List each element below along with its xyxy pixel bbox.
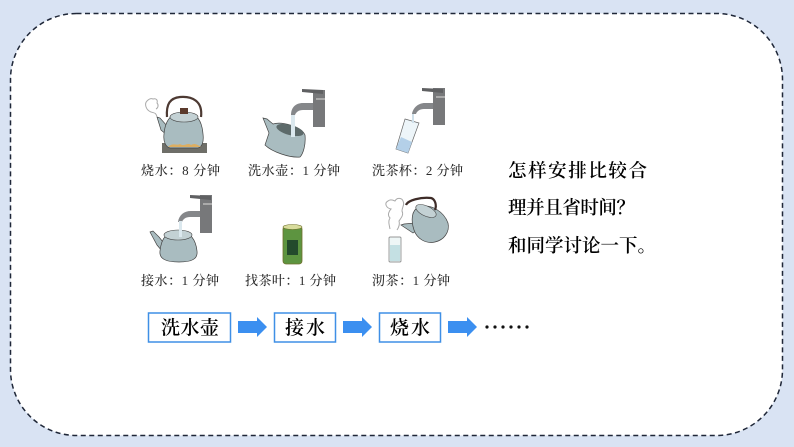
text block: question: 怎样安排比较合 (508, 161, 647, 182)
icon: faucet washing cup (396, 88, 445, 153)
flow step: wash kettle: 洗水壶 (161, 317, 219, 339)
label: wash cups: 洗茶杯：2 分钟 (372, 163, 463, 178)
icon: faucet washing kettle (263, 89, 325, 157)
label: wash kettle: 洗水壶：1 分钟 (248, 163, 340, 178)
flow step: fill water: 接水 (285, 317, 325, 339)
label: make tea: 沏茶：1 分钟 (372, 273, 450, 288)
text block: question: 和同学讨论一下。 (508, 236, 656, 257)
arrow (448, 317, 477, 337)
label: boil water: 烧水：8 分钟 (141, 163, 220, 178)
arrow (238, 317, 267, 337)
text block: question: 理并且省时间？ (508, 198, 635, 219)
text block: question (508, 161, 656, 257)
flow step: boil water: 烧水 (389, 317, 430, 339)
arrow (343, 317, 372, 337)
icon: kettle pouring into glass (386, 198, 448, 262)
label: find tea: 找茶叶：1 分钟 (245, 273, 336, 288)
label: fill water: 接水：1 分钟 (141, 273, 219, 288)
icon: kettle boiling on burner (146, 97, 207, 153)
flow step: fill water (274, 313, 336, 342)
icon: faucet filling kettle (150, 195, 212, 262)
ellipsis dots (485, 325, 529, 329)
flow step: wash kettle (148, 313, 230, 342)
icon: tea canister (283, 224, 302, 264)
flow step: boil water (380, 313, 440, 342)
